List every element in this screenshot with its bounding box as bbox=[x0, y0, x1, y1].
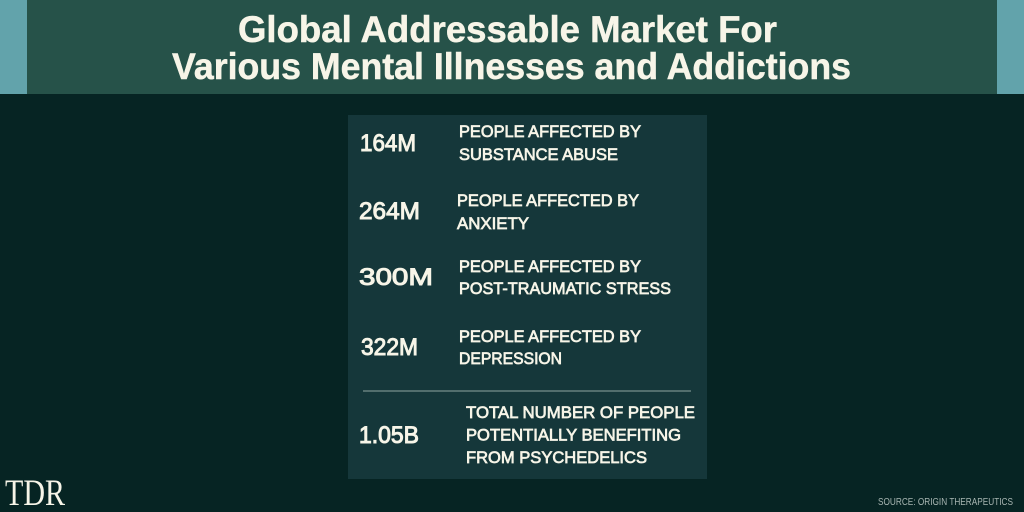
row: depression: 322M bbox=[361, 334, 418, 361]
header banner bbox=[0, 0, 1024, 94]
row: anxiety bbox=[359, 192, 639, 233]
row: post-traumatic stress bbox=[359, 258, 671, 298]
title: Global Addressable Market For bbox=[238, 9, 777, 50]
row: post-traumatic stress: PEOPLE AFFECTED BY bbox=[459, 258, 641, 276]
row: total: TOTAL NUMBER OF PEOPLE bbox=[466, 404, 695, 422]
row: anxiety: ANXIETY bbox=[457, 215, 529, 233]
row: depression: DEPRESSION bbox=[459, 350, 562, 368]
row: anxiety: 264M bbox=[359, 198, 420, 225]
row: total bbox=[359, 404, 695, 467]
title: Various Mental Illnesses and Addictions bbox=[172, 46, 851, 87]
row: depression bbox=[361, 328, 641, 368]
row: substance abuse: PEOPLE AFFECTED BY bbox=[459, 123, 641, 141]
row: post-traumatic stress: 300M bbox=[359, 264, 433, 291]
row: substance abuse: SUBSTANCE ABUSE bbox=[459, 146, 618, 164]
title bbox=[172, 9, 851, 87]
row: substance abuse bbox=[360, 123, 641, 164]
row: anxiety: PEOPLE AFFECTED BY bbox=[457, 192, 639, 210]
row: total: POTENTIALLY BENEFITING bbox=[466, 426, 681, 444]
left accent bar bbox=[0, 0, 27, 94]
row: substance abuse: 164M bbox=[360, 130, 416, 157]
row: depression: PEOPLE AFFECTED BY bbox=[459, 328, 641, 346]
row: total: FROM PSYCHEDELICS bbox=[466, 449, 647, 467]
row: total: 1.05B bbox=[359, 422, 419, 449]
right accent bar bbox=[997, 0, 1024, 94]
row: post-traumatic stress: POST-TRAUMATIC STRESS bbox=[459, 280, 671, 298]
panel: market figures bbox=[348, 115, 707, 479]
